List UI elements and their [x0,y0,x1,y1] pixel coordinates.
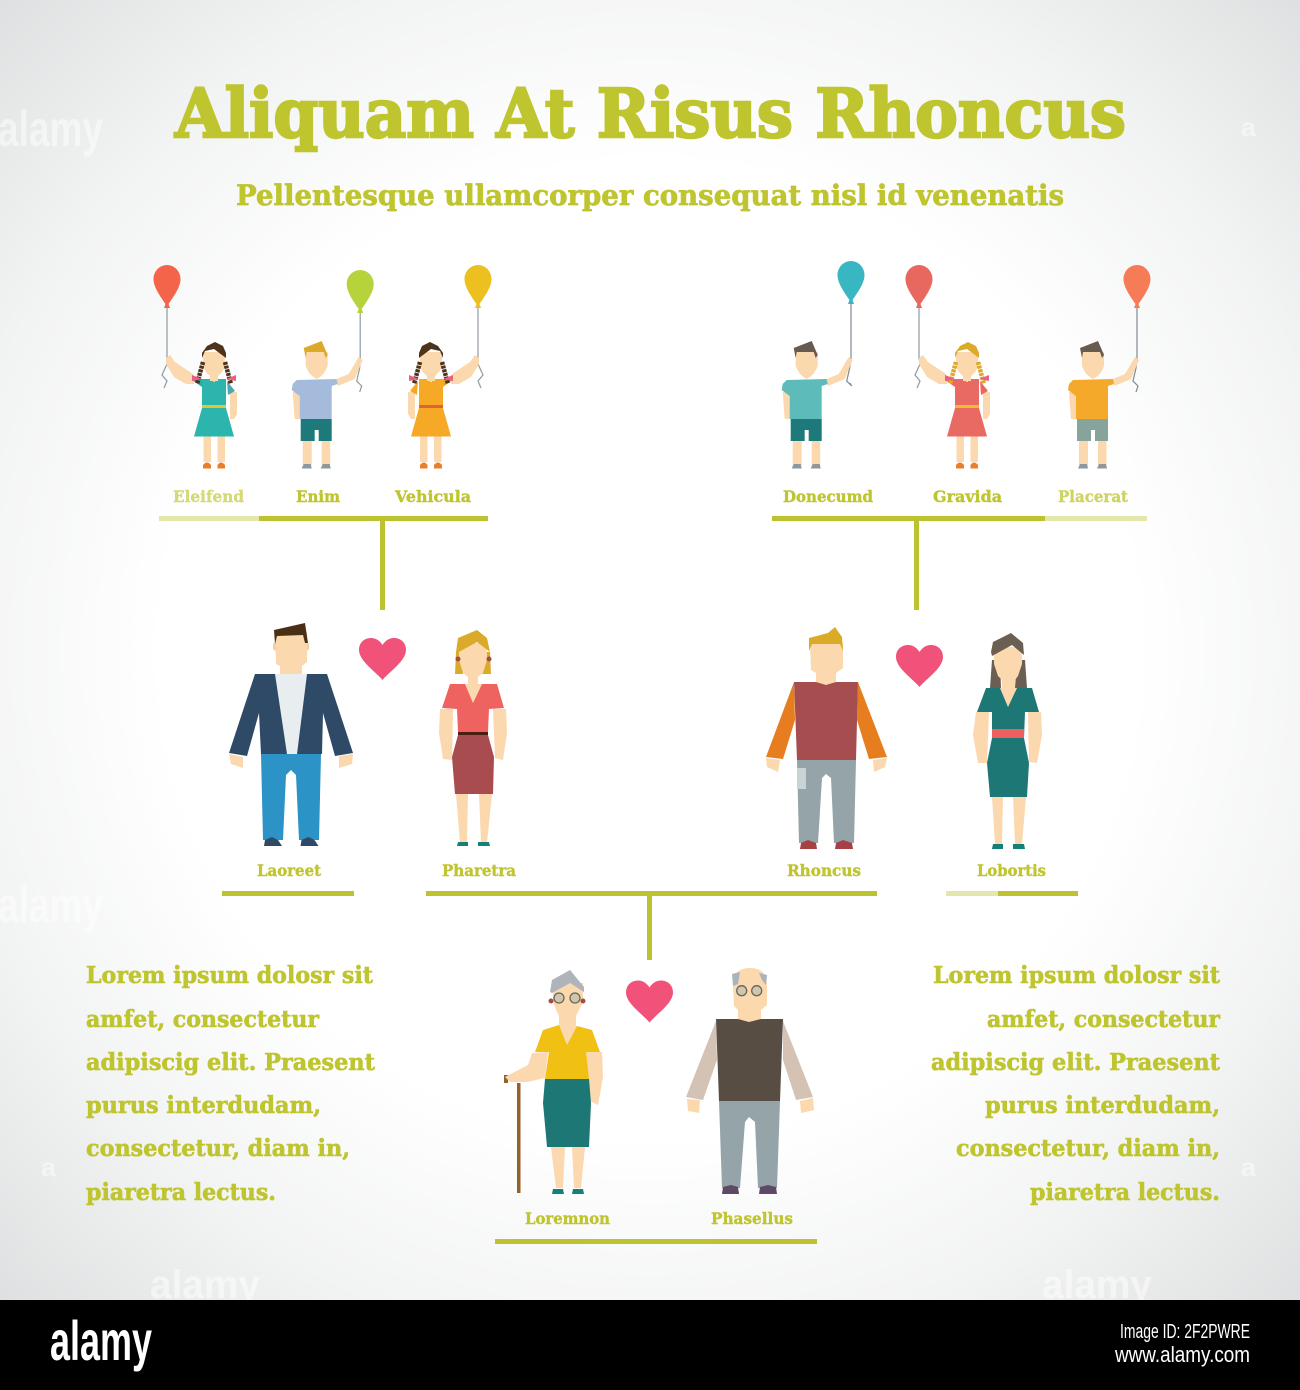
child: Enim boy with green balloon [292,270,374,468]
grandparent name labels [525,1209,793,1228]
connector: children right [772,516,1147,610]
title: Aliquam At Risus Rhoncus [174,74,1126,153]
parent name labels [257,861,1046,880]
text block: left: purus interdudam, [86,1092,321,1119]
parent name labels: Lobortis [977,861,1046,880]
text block: right: Lorem ipsum dolosr sit [933,962,1220,989]
adult: Laoreet man [229,623,353,846]
watermarks: a [1241,1152,1257,1182]
text block: left: adipiscig elit. Praesent [86,1049,375,1076]
adult: Pharetra woman [439,630,507,846]
parent name labels: Rhoncus [787,861,861,880]
grandparent name labels: Phasellus [711,1209,793,1228]
adult: Rhoncus man [766,627,887,849]
child: Placerat boy with orange balloon [1068,265,1150,468]
text block: left: amfet, consectetur [86,1006,320,1033]
grandparent name labels: Loremnon [525,1209,610,1228]
subtitle: Pellentesque ullamcorper consequat nisl id venenatis [236,179,1064,212]
text block: right: adipiscig elit. Praesent [931,1049,1220,1076]
text block: right: purus interdudam, [985,1092,1220,1119]
connector: grandparents [495,1239,817,1244]
connector: parents [222,891,1078,960]
child name labels [173,487,1129,506]
footer bar [0,1300,1300,1390]
heart: right couple [896,645,943,687]
watermarks: alamy [0,877,103,933]
child name labels: Enim [296,487,340,506]
grandparent: Phasellus grandfather [686,968,814,1194]
watermarks: alamy [1042,1263,1153,1307]
watermarks: a [1241,112,1257,142]
text block: left: Lorem ipsum dolosr sit [86,962,373,989]
child name labels: Donecumd [783,487,873,506]
watermark overlay on bars [159,516,1147,896]
text block: left [86,962,375,1206]
parent name labels: Pharetra [442,861,516,880]
watermarks: alamy [0,101,103,157]
heart: grandparents [626,980,673,1022]
watermarks: alamy [150,1263,261,1307]
watermarks: a [41,1152,57,1182]
text block: right: amfet, consectetur [987,1006,1221,1033]
child: Eleifend girl with red balloon [154,265,237,468]
child: Vehicula girl with yellow balloon [408,265,492,468]
text block: right: consectetur, diam in, [956,1135,1220,1162]
grandparent: Loremnon grandmother with cane [504,970,603,1194]
child name labels: Placerat [1058,487,1129,506]
text block: left: piaretra lectus. [86,1179,276,1206]
adult: Lobortis woman [973,633,1042,849]
footer url: www.alamy.com [1114,1342,1250,1367]
connector: children left [159,516,488,610]
footer logo: alamy [50,1309,152,1372]
text block: right: piaretra lectus. [1030,1179,1220,1206]
child name labels: Vehicula [394,487,471,506]
child name labels: Eleifend [173,487,244,506]
child: Donecumd boy with teal balloon [782,261,864,468]
child name labels: Gravida [933,487,1002,506]
text block: left: consectetur, diam in, [86,1135,350,1162]
parent name labels: Laoreet [257,861,322,880]
heart: left couple [359,638,406,680]
child: Gravida girl with red balloon [906,265,990,468]
text block: right [931,962,1221,1206]
